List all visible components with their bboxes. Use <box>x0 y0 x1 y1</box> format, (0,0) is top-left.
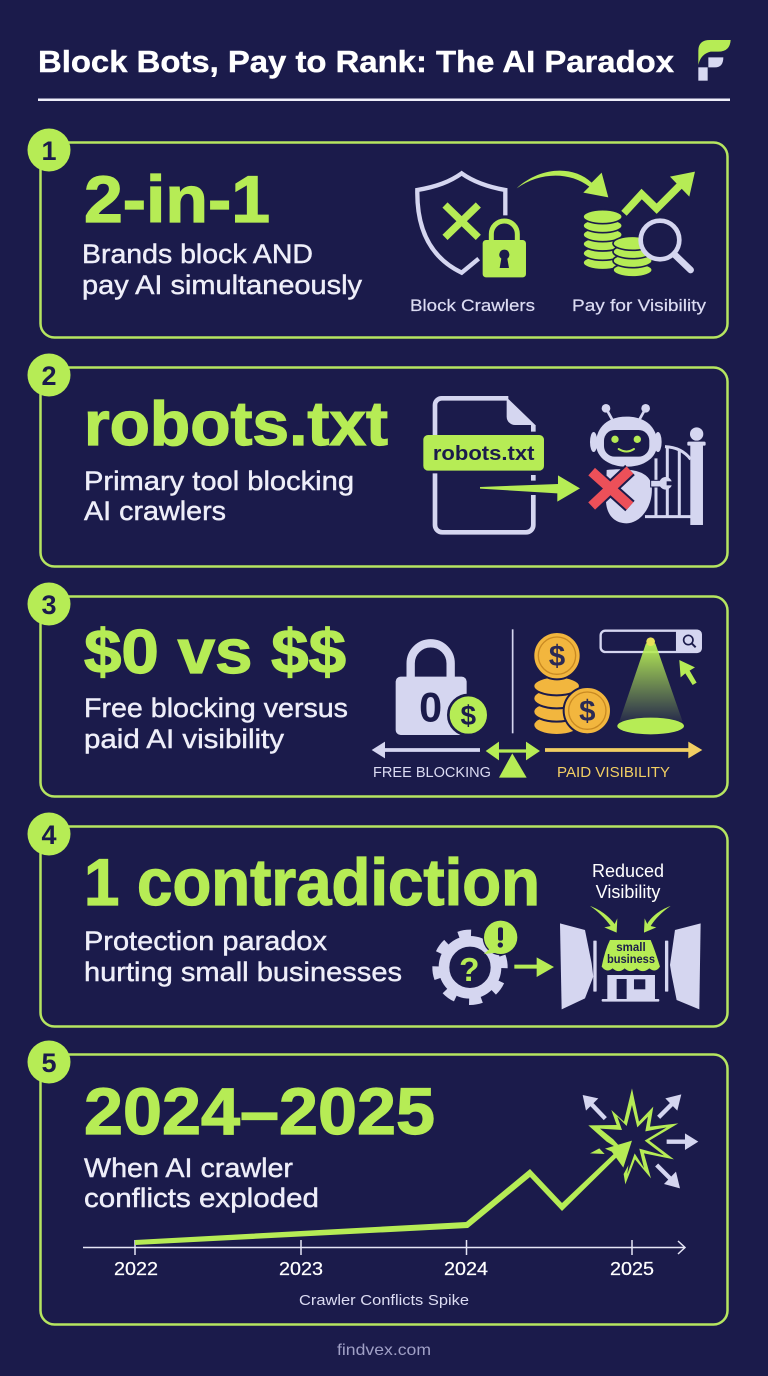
description 5: conflicts exploded <box>84 1183 319 1213</box>
panel 5: 2024–2025 <box>28 1040 728 1324</box>
description 1: Brands block AND <box>82 239 313 269</box>
axis labels: 2022 <box>114 1259 158 1279</box>
badge 2 <box>28 354 70 396</box>
chart: rising conflicts line <box>135 1088 698 1245</box>
panel 1: 2-in-1 <box>28 128 728 338</box>
panel 3: $0 vs $$ <box>28 582 728 796</box>
badge 5 <box>28 1040 70 1084</box>
description 5: When AI crawler <box>84 1153 293 1183</box>
description 4: hurting small businesses <box>84 957 402 987</box>
axis labels: 2024 <box>444 1259 488 1279</box>
label: small business: small <box>616 942 646 954</box>
icon: gear, squeezed small business <box>426 906 701 1011</box>
axis labels: 2023 <box>279 1259 323 1279</box>
stat: 2-in-1: 2-in-1 <box>84 162 270 236</box>
icon: robots file and blocked robot <box>423 397 706 532</box>
description 2: Primary tool blocking <box>84 466 354 496</box>
description 3: Free blocking versus <box>84 693 348 723</box>
axis labels: 2025 <box>610 1259 654 1279</box>
title: Block Bots, Pay to Rank: The AI Paradox <box>38 44 675 79</box>
description 2: AI crawlers <box>84 496 226 526</box>
label: small business second line: business <box>607 954 655 966</box>
icon: robots file and blocked robot: robots.txt <box>433 442 535 465</box>
icon: free lock versus paid coins and spotlight: $ <box>579 695 595 728</box>
label: paid visibility: PAID VISIBILITY <box>557 765 670 781</box>
icon: explosion burst <box>583 1088 698 1188</box>
badge 4 <box>28 812 70 856</box>
label: pay for visibility: Pay for Visibility <box>572 297 707 315</box>
badge 3 <box>28 582 70 626</box>
description 1: pay AI simultaneously <box>82 270 363 300</box>
label: block crawlers: Block Crawlers <box>410 297 535 315</box>
label: reduced visibility: Visibility <box>596 882 660 902</box>
panel 4: 1 contradiction <box>28 812 728 1026</box>
description 4: Protection paradox <box>84 926 328 956</box>
badge 4: 4 <box>41 820 57 850</box>
panel 2: robots.txt <box>28 354 728 566</box>
badge 2: 2 <box>41 361 57 391</box>
icon: free lock versus paid coins and spotlight <box>372 629 702 778</box>
icon: shield with lock and coins <box>417 171 695 277</box>
label: free blocking: FREE BLOCKING <box>373 765 491 781</box>
label: reduced visibility: Reduced <box>592 861 664 881</box>
badge 1 <box>28 128 70 172</box>
stat: $0 vs $$: $0 vs $$ <box>84 618 346 687</box>
badge 1: 1 <box>41 136 57 166</box>
chart: timeline axis <box>83 1240 685 1255</box>
stat: 1 contradiction: 1 contradiction <box>84 845 540 919</box>
icon: free lock versus paid coins and spotlight: $ <box>461 700 477 731</box>
icon: findvex logo <box>698 40 731 81</box>
icon: gear, squeezed small business: ? <box>459 952 480 989</box>
footer: findvex.com: findvex.com <box>337 1342 431 1359</box>
icon: free lock versus paid coins and spotlight: $ <box>549 640 565 673</box>
description 3: paid AI visibility <box>84 724 285 754</box>
badge 3: 3 <box>41 590 57 620</box>
badge 5: 5 <box>41 1048 57 1078</box>
chart caption: Crawler Conflicts Spike <box>299 1293 469 1309</box>
axis labels <box>114 1259 654 1279</box>
stat: robots.txt: robots.txt <box>84 390 388 459</box>
icon: free lock versus paid coins and spotlight: 0 <box>419 684 442 730</box>
stat: 2024–2025: 2024–2025 <box>84 1074 435 1148</box>
